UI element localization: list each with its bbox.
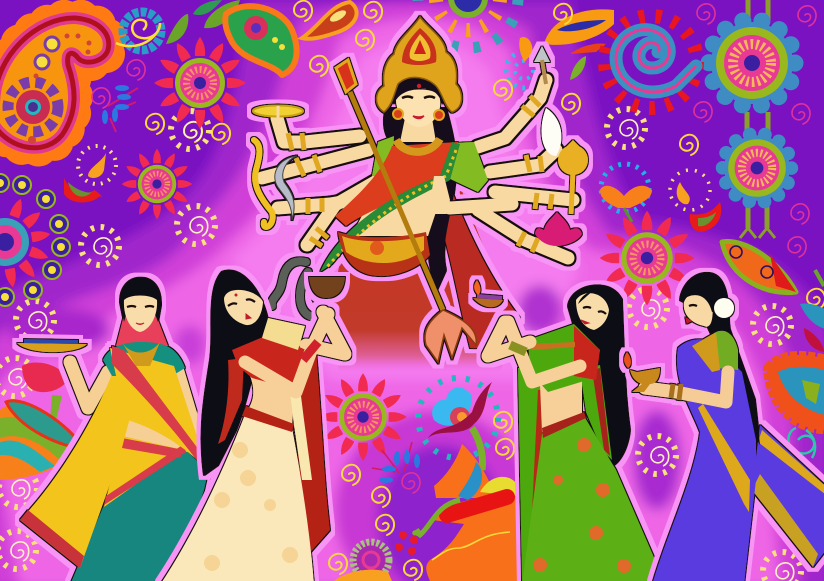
woman 2: red bangles [303,342,318,360]
spirals: sun style [0,109,801,581]
goddess: arrow [534,46,550,84]
goddess: crown [376,17,462,112]
goddess: red sash [335,142,458,226]
paisley: right edge with leaves [767,270,824,458]
woman 4: bangles [671,384,681,400]
woman 3: midriff [540,380,582,432]
woman 3: back green panel [580,365,612,460]
ring dots: left [0,174,70,306]
woman 1: chest yellow drape [110,348,208,470]
small lamp: left [64,146,116,202]
goddess: torso [350,146,452,236]
woman 2: blouse and shoulder saree [232,334,306,390]
woman 2: front arm [245,314,328,392]
woman 4 [624,273,824,581]
flower garland: top right [709,0,795,238]
woman 1 [17,278,208,581]
woman 1: tray [17,343,87,352]
woman 3: hair [568,285,630,466]
woman 2: left border [218,358,244,444]
woman 4: head [684,292,713,327]
woman 3: bangles [510,345,526,352]
woman 3: lamp [473,298,503,307]
flower: right centre red [600,211,694,305]
goddess: conch shell [541,108,561,156]
woman 1: blouse [103,342,185,376]
goddess: blessing hand [430,176,450,214]
woman 4: train [752,425,824,567]
goddess: mace [558,140,588,214]
goddess: right drape dark fold [435,178,520,348]
blue petal spray: left [102,85,138,132]
spiral flower: top right red and blue [605,16,697,108]
goddess: blouse right [448,142,488,192]
flower: top left red [154,37,246,129]
woman 4: purple saree [652,339,756,581]
paisley: top left large [0,18,109,148]
woman 1: teal skirt [70,450,208,581]
woman 1: red veil [116,315,168,346]
goddess: long hair [384,108,457,290]
goddess: necklace [396,139,440,152]
goddess: bow [254,140,273,227]
goddess: belt [338,232,430,276]
flower: top centre half [418,0,518,48]
goddess: sickle [275,156,297,220]
woman 1: yellow hanging saree [20,374,140,568]
goddess: blouse left [372,136,394,178]
flower: bottom centre red [319,373,407,461]
woman 3: skirt motifs [533,438,631,573]
woman 4: arm [645,372,728,402]
woman 3: green skirt [522,416,666,581]
goddess: lotus [535,212,582,246]
goddess: arms right [437,80,573,258]
goddess: arms left [262,118,382,245]
woman 2: hair [202,271,268,475]
goddess: skirt fading out [333,180,522,372]
goddess: staff [350,92,443,310]
spiral flower: top left blue and leaves [116,0,240,50]
woman 2: cream skirt [160,412,314,581]
woman 1: arms [70,362,208,472]
goddess: tray [253,106,303,128]
blue spray [372,442,420,493]
goddess: figure [253,17,588,362]
blue droplet spray [506,37,542,88]
goddess: neck and face [400,118,436,142]
goddess: green sash border [320,142,460,272]
goddess [253,17,588,372]
woman 2 [160,271,345,581]
woman 3: arms [488,322,580,382]
paisley: top orange [302,2,357,39]
shell paisley: right [722,242,796,293]
woman 2: head [224,290,263,325]
woman 2: red drape [288,350,330,555]
paisley: top centre green [225,6,297,75]
woman 1: midriff [122,372,188,452]
blue spray flower [418,378,498,470]
goddess: trident [425,310,476,362]
woman 1: head [120,278,161,322]
flower: mid left red [122,149,192,219]
pot: left [0,362,83,480]
bottom centre bird and pots [334,378,523,581]
woman 4: blouse [716,331,738,370]
lotus and blue spray: right [600,164,652,222]
woman 2: cream skirt motifs [204,442,298,571]
woman 3: green drape column [518,368,544,581]
woman 1: skirt yellow band [104,436,184,507]
woman 2: bowl [309,277,345,298]
goddess: snake [272,261,319,316]
woman 2: arm back [306,312,345,354]
small lamp: right [670,170,721,232]
woman 4: lamp [624,352,662,392]
woman 4: hair flower [714,298,734,318]
woman 3: blouse and chest drape [528,324,600,392]
paisley flower [8,82,58,132]
flower: left edge [0,197,51,288]
woman 3: head [576,293,609,330]
woman 4: hair [680,273,760,445]
woman 2: midriff [246,376,295,428]
paisley: top right orange [544,9,614,80]
woman 3 [473,280,666,581]
scalloped spiral [353,542,389,578]
goddess: bangles [288,96,552,252]
woman 4: gold border [698,404,750,512]
